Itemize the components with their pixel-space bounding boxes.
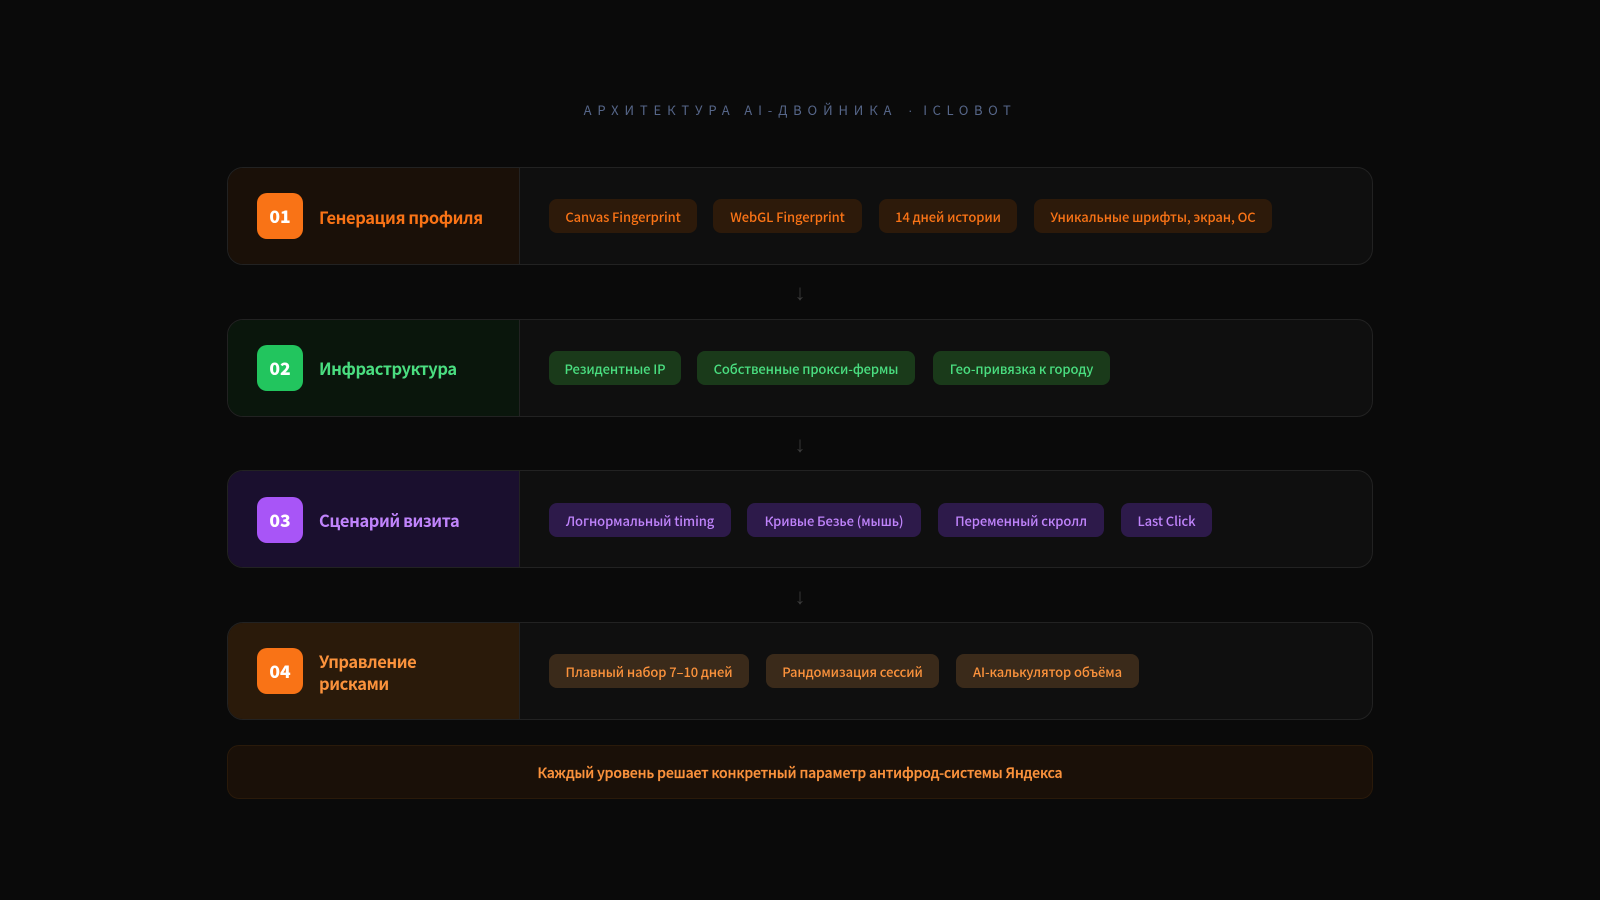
badge 01: [257, 193, 303, 239]
panel: level 02 infrastructure: [227, 319, 1373, 417]
level 02 title: Инфраструктура: [319, 356, 457, 380]
callout: Каждый уровень решает конкретный параметр антифрод-системы Яндекса: [538, 763, 1062, 783]
badge 03: 03: [269, 508, 291, 533]
chip: proxy farms: Собственные прокси-фермы: [714, 359, 898, 378]
panel: level 01 profile generation: [227, 167, 1373, 265]
heading: АРХИТЕКТУРА AI-ДВОЙНИКА ICLOBOT: [584, 100, 1016, 119]
chip: webgl: WebGL Fingerprint: [730, 207, 845, 226]
chip: history: [879, 199, 1017, 233]
arrow 1: ↓: [794, 280, 806, 305]
chip: session randomization: [766, 654, 939, 688]
callout: [227, 745, 1373, 799]
chip: residential ip: [549, 351, 681, 385]
badge 02: [257, 345, 303, 391]
chip: last click: [1121, 503, 1212, 537]
badge 04: [257, 648, 303, 694]
chip: ramp-up: Плавный набор 7–10 дней: [565, 662, 733, 681]
chip: ai calculator: [956, 654, 1139, 688]
chip: residential ip: Резидентные IP: [565, 359, 665, 378]
badge 01: 01: [269, 204, 291, 229]
chip: session randomization: Рандомизация сессий: [782, 662, 923, 681]
level 02 header: [228, 320, 520, 416]
chip: canvas: Canvas Fingerprint: [565, 207, 681, 226]
panel: level 03 visit scenario: [227, 470, 1373, 568]
chip: geo: [933, 351, 1110, 385]
chip: last click: Last Click: [1138, 511, 1195, 530]
badge 03: [257, 497, 303, 543]
chip: ramp-up: [549, 654, 749, 688]
badge 02: 02: [269, 356, 291, 381]
level 04 title: [319, 649, 416, 695]
chip: geo: Гео-привязка к городу: [950, 359, 1093, 378]
chip: canvas: [549, 199, 697, 233]
level 04 title: рисками: [319, 671, 389, 695]
badge 04: 04: [269, 659, 291, 684]
panel: level 04 risk management: [227, 622, 1373, 720]
level 01 title: Генерация профиля: [319, 205, 483, 229]
chip: timing: [549, 503, 731, 537]
arrow 3: ↓: [794, 584, 806, 609]
level 01 header: [228, 168, 520, 264]
chip: scroll: [938, 503, 1104, 537]
chip: proxy farms: [697, 351, 915, 385]
chip: fonts: [1034, 199, 1272, 233]
arrow 2: ↓: [794, 432, 806, 457]
level 03 title: Сценарий визита: [319, 508, 459, 532]
chip: fonts: Уникальные шрифты, экран, ОС: [1050, 207, 1256, 226]
heading: ·: [908, 103, 912, 118]
chip: webgl: [713, 199, 862, 233]
chip: timing: Логнормальный timing: [566, 511, 714, 530]
level 04 title: Управление: [319, 649, 416, 673]
level 04 header: [228, 623, 520, 719]
chip: history: 14 дней истории: [895, 207, 1001, 226]
chip: bezier: Кривые Безье (мышь): [765, 511, 903, 530]
chip: scroll: Переменный скролл: [955, 511, 1087, 530]
chip: bezier: [747, 503, 921, 537]
level 03 header: [228, 471, 520, 567]
chip: ai calculator: AI-калькулятор объёма: [973, 662, 1122, 681]
